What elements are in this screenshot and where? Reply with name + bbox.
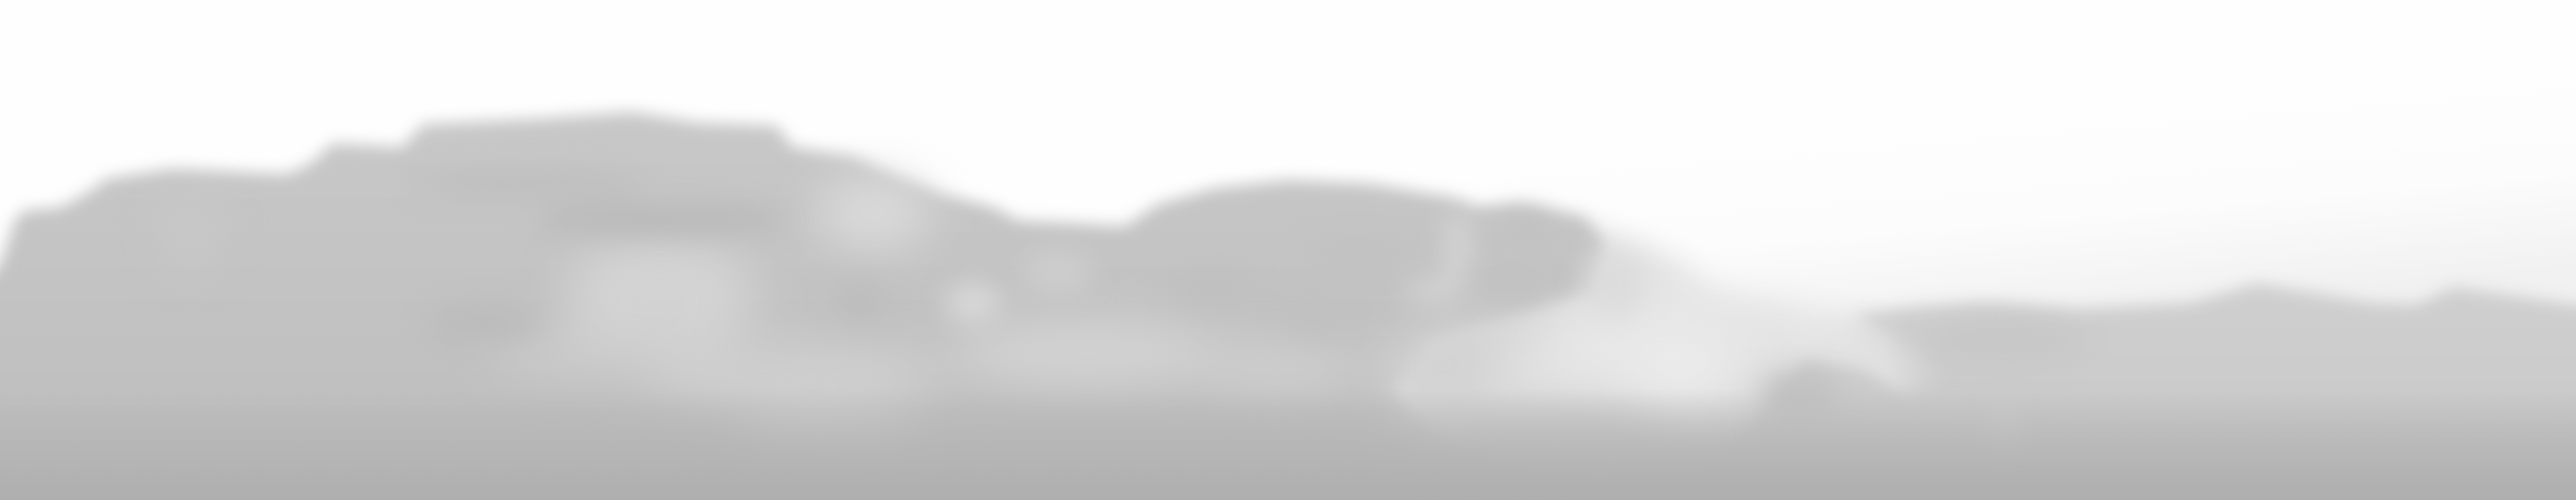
main cloud mass — [0, 112, 1652, 500]
right-hand low cloud bank — [1689, 283, 2576, 500]
highlight: small bright puff — [945, 250, 1094, 322]
shadow: upper left band — [411, 170, 1256, 341]
ground band joining the two masses — [0, 477, 2576, 500]
darker ground haze along the bottom — [0, 389, 2576, 500]
soft transition over the mist boundary — [1373, 308, 1689, 460]
light highlights inside the cloud — [165, 176, 2018, 459]
highlight: central left billow — [165, 176, 1366, 455]
highlight: right bright billow — [1542, 312, 1748, 404]
dark shadows inside the cloud — [411, 170, 2085, 415]
highlight: right streaks — [1403, 209, 2018, 459]
shadow: right cloud folds — [1285, 211, 2085, 415]
pale mist between the cloud masses — [1395, 220, 1953, 500]
